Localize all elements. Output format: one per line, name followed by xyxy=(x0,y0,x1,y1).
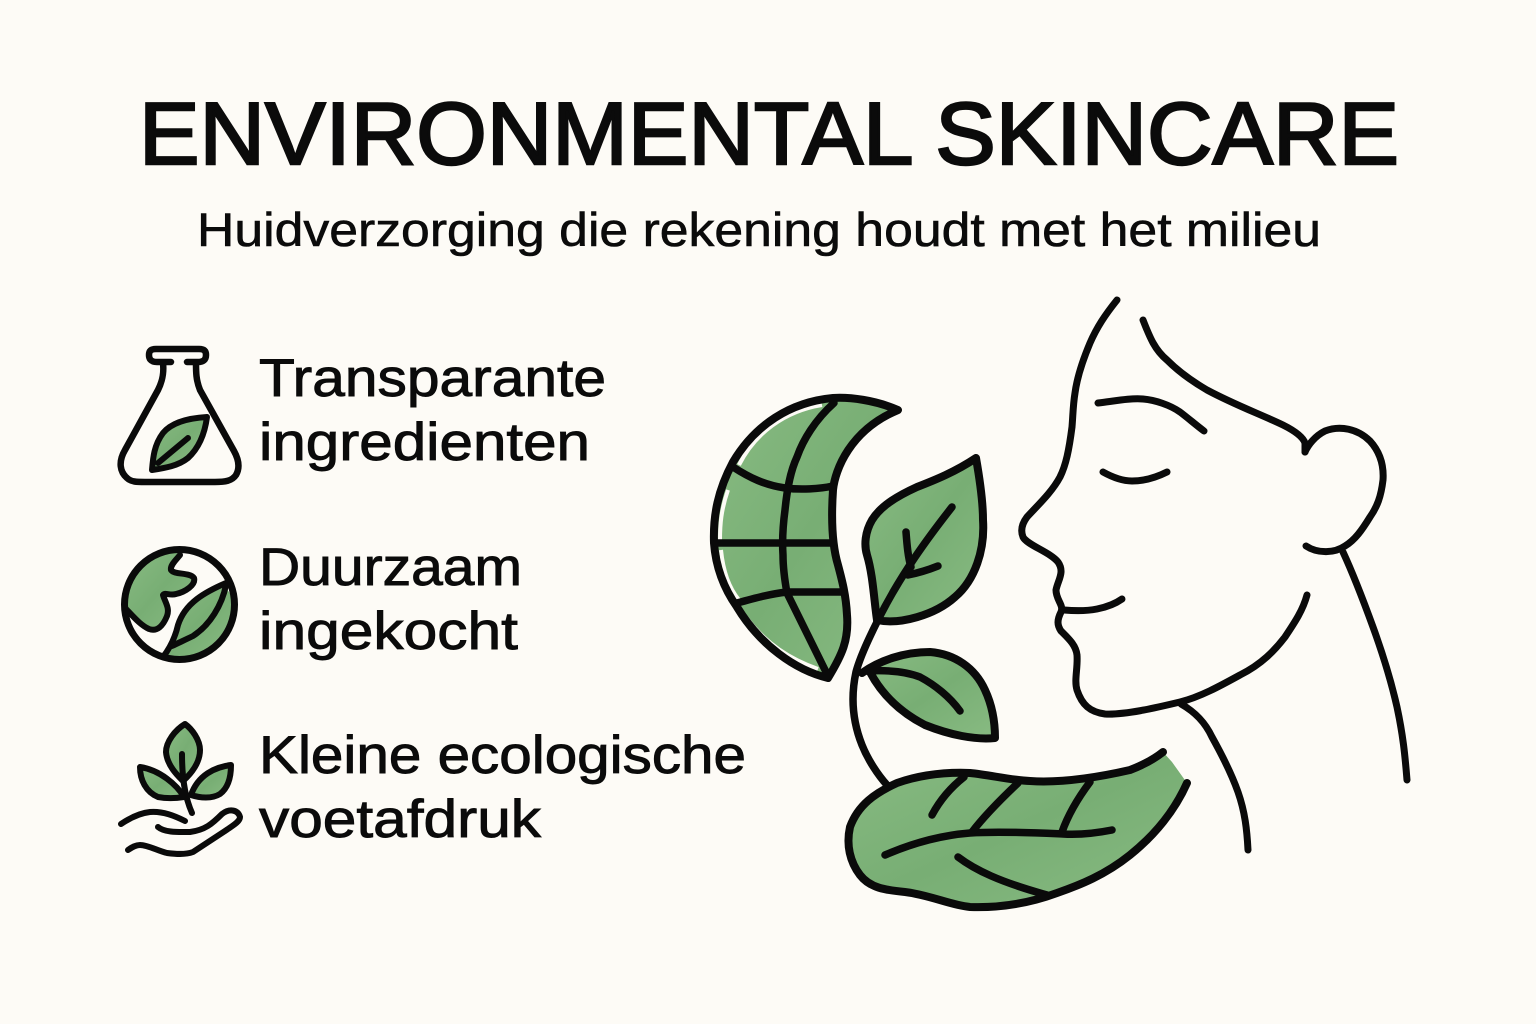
text: Kleine ecologische voetafdruk: Kleine ecologische xyxy=(259,726,746,785)
text: Kleine ecologische voetafdruk: voetafdruk xyxy=(259,790,542,849)
ear xyxy=(1305,428,1383,552)
text: Transparante ingredienten: Transparante xyxy=(259,349,606,408)
text: Kleine ecologische voetafdruk xyxy=(259,726,746,849)
illustration: small lower leaf xyxy=(862,652,995,738)
text: Duurzaam ingekocht: Duurzaam xyxy=(259,538,522,597)
mouth xyxy=(1064,599,1122,611)
subtitle: Huidverzorging die rekening houdt met het milieu xyxy=(197,203,1321,256)
eyebrow xyxy=(1098,399,1204,431)
face contour xyxy=(1022,300,1307,714)
neck front xyxy=(1181,704,1248,850)
text: Duurzaam ingekocht xyxy=(259,538,522,661)
illustration: upper leaf with stem xyxy=(853,458,983,785)
hairline xyxy=(1143,320,1305,452)
icon: flask with leaf xyxy=(121,349,238,482)
illustration: face in profile xyxy=(1022,300,1407,850)
text: Transparante ingredienten xyxy=(259,349,606,472)
title: ENVIRONMENTAL SKINCARE xyxy=(139,84,1399,183)
illustration: botanical globe leaf xyxy=(714,398,898,678)
icon: globe with leaf xyxy=(124,550,234,660)
closed eye xyxy=(1103,472,1167,481)
icon: plant in hand xyxy=(121,724,240,854)
text: Duurzaam ingekocht: ingekocht xyxy=(259,602,518,661)
text: Transparante ingredienten: ingredienten xyxy=(259,413,590,472)
illustration: large bottom leaf xyxy=(848,752,1187,907)
neck back xyxy=(1343,552,1407,780)
